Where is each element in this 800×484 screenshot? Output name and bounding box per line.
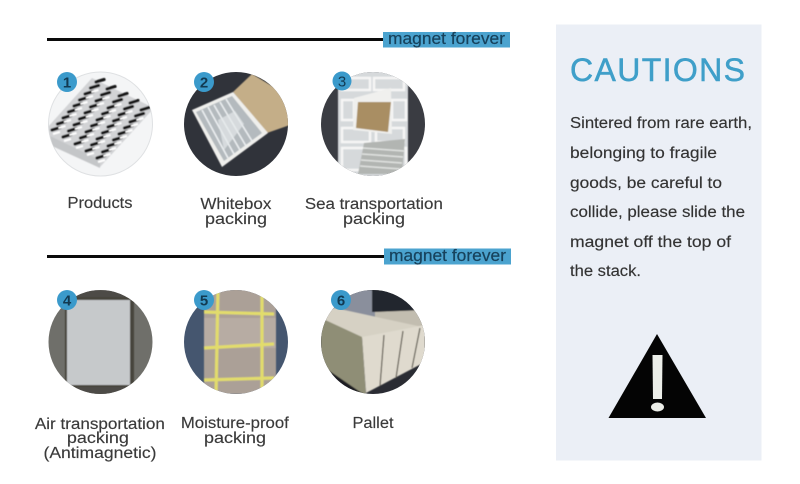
badge 5: 5 — [200, 292, 208, 310]
item 4: air transportation packing — [35, 290, 169, 462]
item 3: sea transportation packing — [305, 70, 447, 228]
badge 6 — [331, 290, 351, 310]
banner: top magnet forever: magnet forever — [388, 30, 506, 48]
badge 4: 4 — [63, 292, 72, 310]
photo: metal sheet — [64, 290, 134, 394]
item 6: pallet — [320, 290, 427, 432]
item 2: whitebox packing — [184, 72, 295, 228]
text block: caution body: goods, be careful to — [570, 175, 722, 192]
photo: crates on pallet — [320, 290, 427, 396]
badge 4 — [57, 290, 77, 310]
label: Sea transportation packing: Sea transportation — [305, 196, 443, 213]
icon: warning triangle — [608, 334, 706, 418]
label: Whitebox packing: Whitebox — [200, 196, 272, 213]
text block: caution body: collide, please slide the — [570, 204, 745, 221]
panel: cautions — [556, 24, 762, 460]
badge 3: 3 — [338, 74, 346, 90]
label: Whitebox packing: packing — [205, 211, 267, 228]
text block: caution body: magnet off the top of — [570, 234, 732, 251]
badge 5 — [194, 290, 214, 310]
photo: open white box — [192, 74, 295, 167]
text block: caution body: the stack. — [570, 263, 641, 280]
label: Moisture-proof packing: Moisture-proof — [181, 415, 290, 432]
label: Air transportation packing (Antimagnetic): (Antimagnetic) — [44, 445, 156, 462]
badge 2: 2 — [200, 74, 208, 92]
badge 1: 1 — [63, 74, 71, 92]
badge 3 — [332, 72, 352, 90]
label: Air transportation packing (Antimagnetic): packing — [67, 430, 129, 447]
item 5: moisture-proof packing — [181, 288, 293, 447]
text block: caution body: Sintered from rare earth, — [570, 115, 752, 132]
badge 2 — [194, 72, 214, 92]
divider: lower section rule — [47, 255, 385, 258]
label: Sea transportation packing: packing — [343, 211, 405, 228]
divider: top section rule — [47, 38, 384, 41]
badge 6: 6 — [337, 292, 345, 310]
label: Pallet: Pallet — [352, 415, 394, 432]
banner: lower magnet forever: magnet forever — [389, 247, 507, 265]
label: Air transportation packing (Antimagnetic): Air transportation — [35, 416, 165, 433]
text block: caution body: belonging to fragile — [570, 145, 717, 162]
photo: strapped carton — [204, 288, 276, 396]
item 1: products — [47, 72, 154, 212]
heading: CAUTIONS: CAUTIONS — [570, 52, 745, 88]
photo: carton with foam — [338, 70, 408, 178]
label: Moisture-proof packing: packing — [204, 430, 266, 447]
photo: magnet stacks — [47, 78, 154, 168]
label: Products: Products — [68, 195, 133, 212]
